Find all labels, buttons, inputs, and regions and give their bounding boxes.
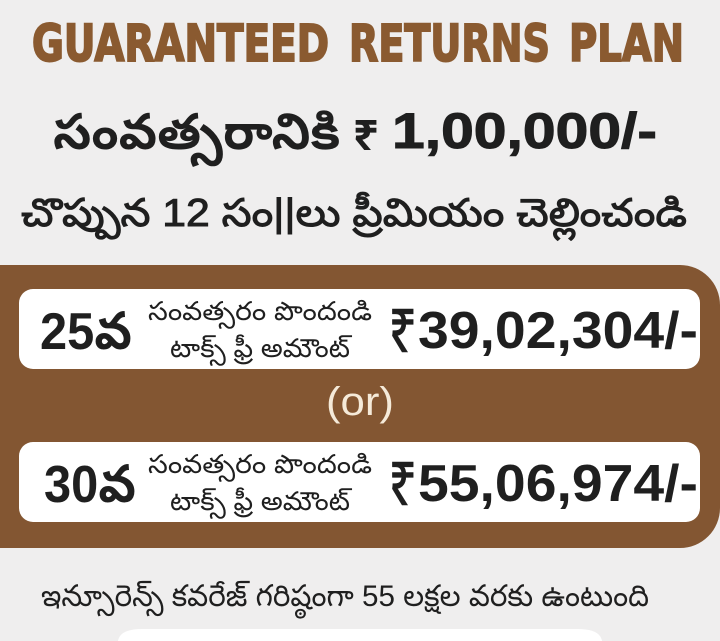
description 30: టాక్స్ ఫ్రీ అమౌంట్ [170, 486, 352, 519]
premium amount heading: సంవత్సరానికి [53, 104, 340, 167]
description 25: సంవత్సరం పొందండి [148, 296, 372, 329]
premium term subheading: చొప్పున 12 సం||లు ప్రీమియం చెల్లించండి [21, 192, 687, 241]
title [32, 15, 684, 74]
amount 30: ₹ [389, 445, 416, 519]
premium amount heading [53, 103, 657, 167]
title: GUARANTEED [32, 15, 329, 74]
description 25: టాక్స్ ఫ్రీ అమౌంట్ [170, 333, 352, 366]
year label 25: 25వ [40, 303, 132, 361]
year label 30: 30వ [44, 456, 136, 514]
bottom white card [118, 629, 602, 641]
insurance coverage note: ఇన్సూరెన్స్ కవరేజ్ గరిష్ఠంగా 55 లక్షల వరకు ఉంటుంది [41, 580, 649, 619]
panel: returns [0, 265, 720, 548]
amount 25: 39,02,304/- [418, 302, 698, 360]
description 25 [148, 296, 372, 366]
row: 25th year [19, 289, 700, 369]
amount 30 [389, 445, 698, 519]
or separator: (or) [326, 380, 394, 424]
title: RETURNS [349, 15, 550, 74]
premium amount heading: 1,00,000/- [392, 103, 657, 159]
amount 25: ₹ [389, 292, 416, 366]
description 30: సంవత్సరం పొందండి [148, 449, 372, 482]
amount 25 [389, 292, 698, 366]
title: PLAN [569, 15, 684, 74]
amount 30: 55,06,974/- [418, 455, 698, 513]
row: 30th year [19, 442, 700, 522]
premium amount heading: ₹ [354, 108, 378, 160]
description 30 [148, 449, 372, 519]
